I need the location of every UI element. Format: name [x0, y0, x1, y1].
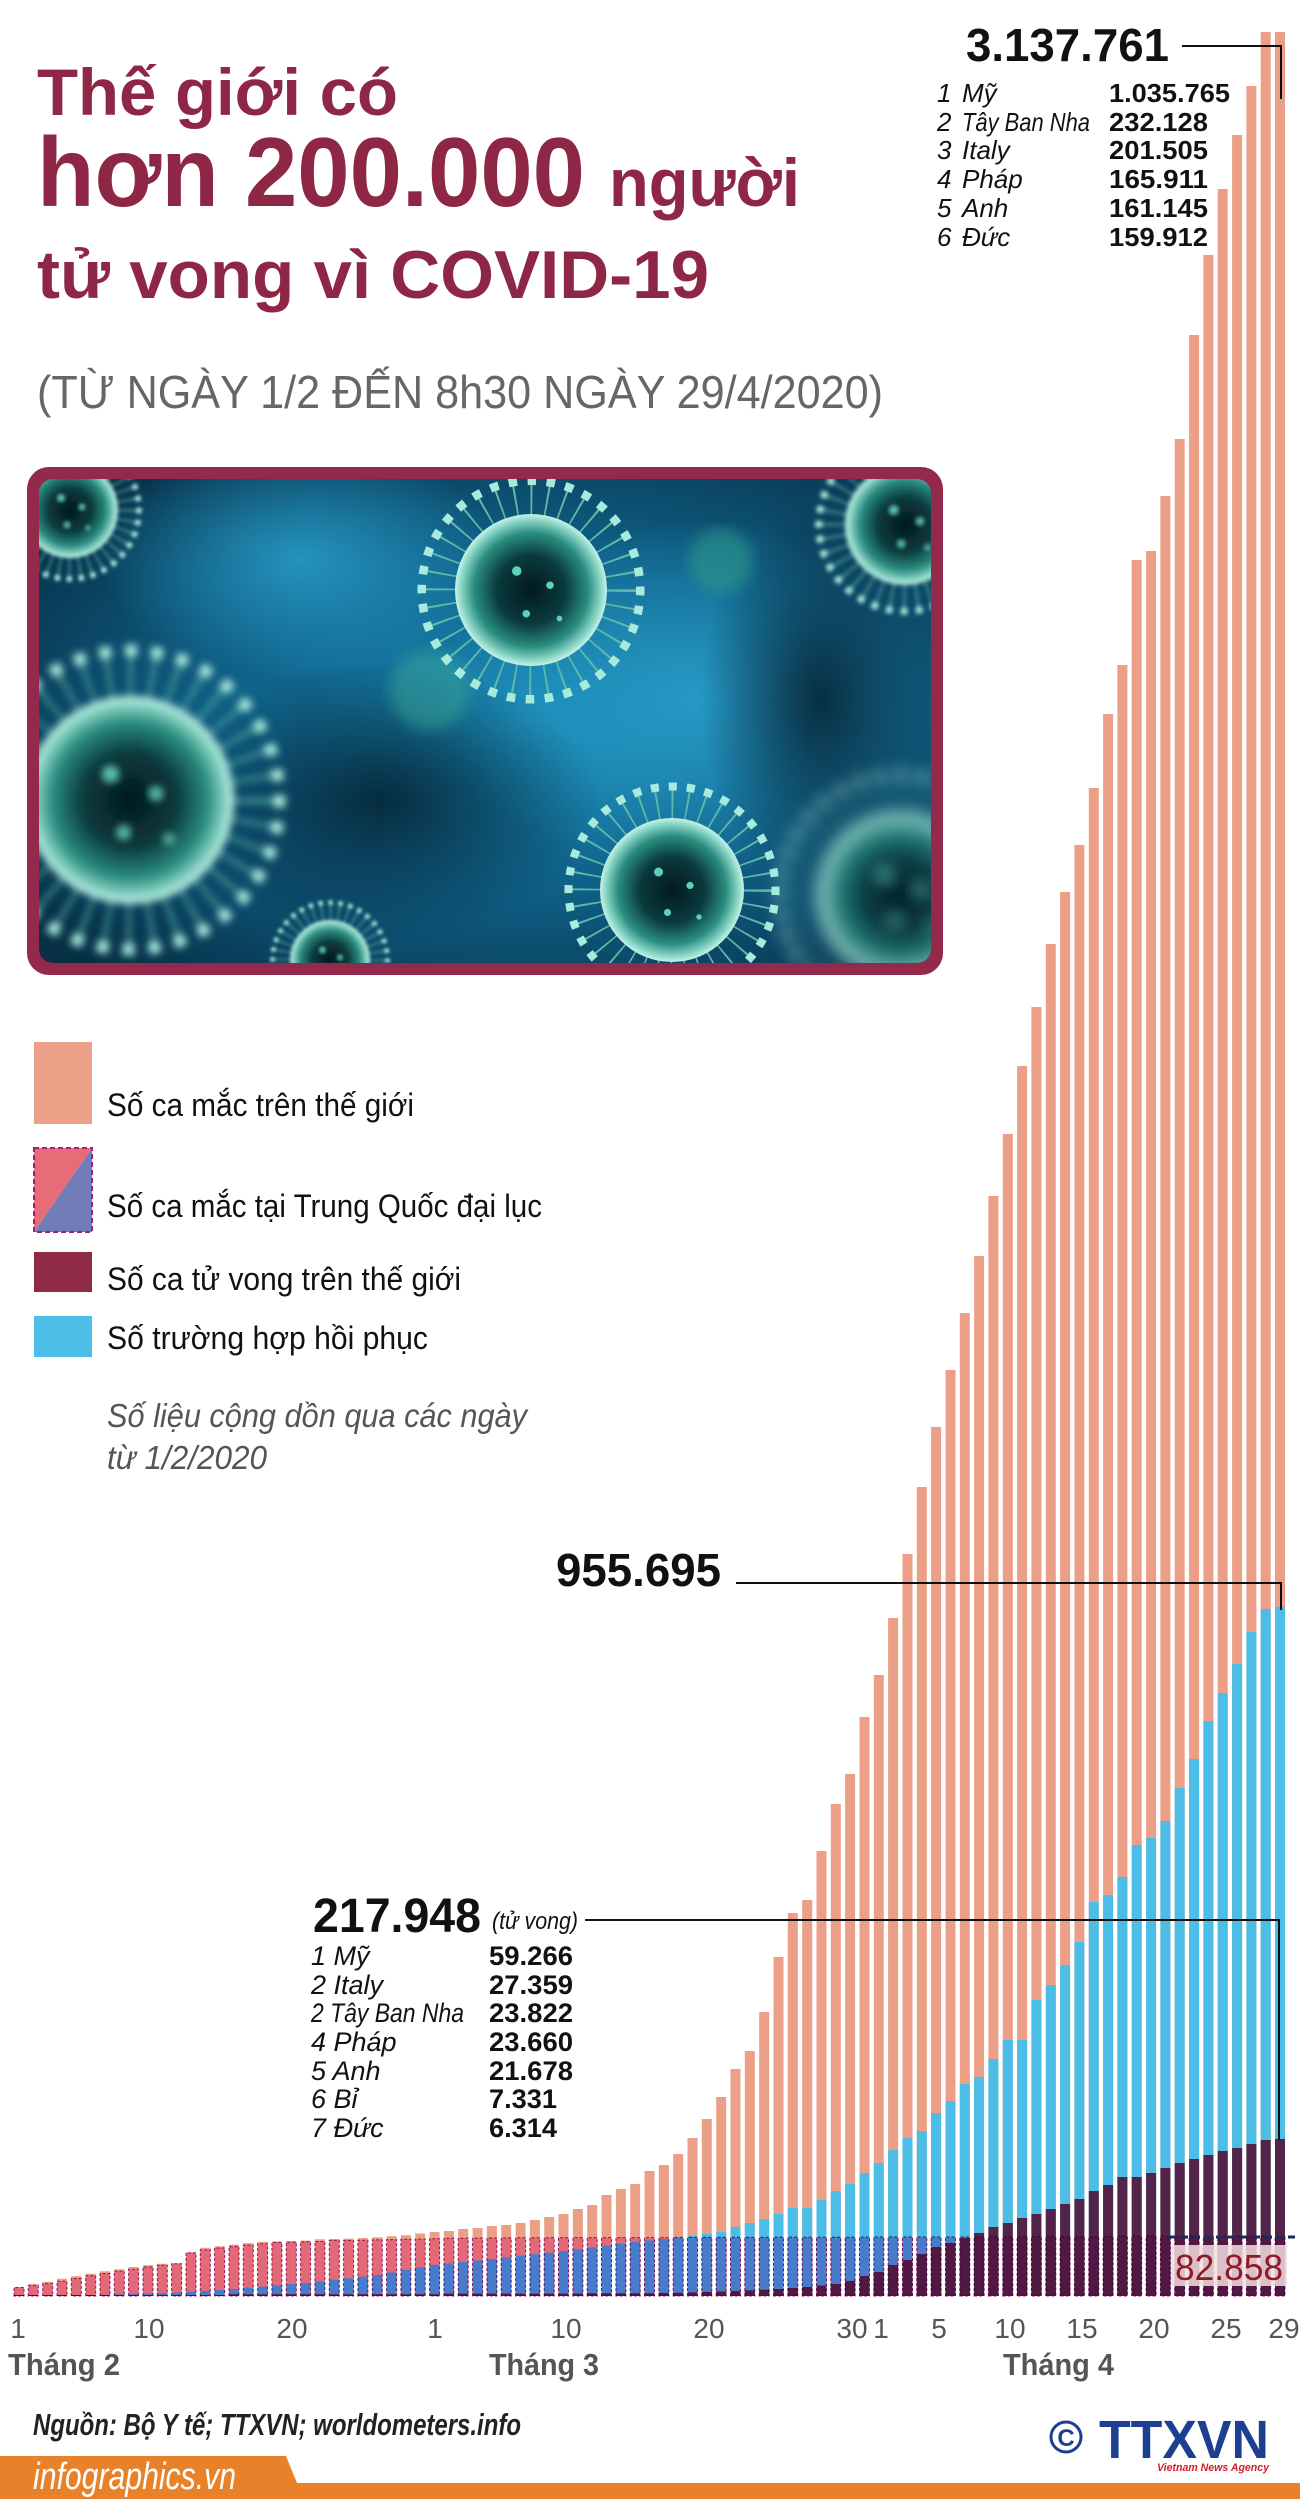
- x axis day labels: 10: [550, 2313, 582, 2344]
- x axis day labels: 20: [1138, 2313, 1170, 2344]
- logo: TTXVN: C: [1057, 2425, 1075, 2452]
- table: cases by country: 161.145: [1109, 193, 1208, 223]
- x axis day labels: 1: [10, 2313, 26, 2344]
- x axis day labels: 1: [427, 2313, 443, 2344]
- table: cases by country: Anh: [960, 193, 1008, 223]
- callout: deaths total: 217.948: [313, 1890, 481, 1943]
- x axis month labels: [8, 2347, 1115, 2382]
- callout: China 82.858: 82.858: [1175, 2247, 1283, 2288]
- table: cases by country: 5: [937, 193, 952, 223]
- x axis day labels: [10, 2313, 1300, 2344]
- table: cases by country: 6: [937, 222, 952, 252]
- table: cases by country: 159.912: [1109, 222, 1208, 252]
- callout: deaths total: (tử vong): [492, 1908, 578, 1935]
- table: cases by country: 201.505: [1109, 135, 1208, 165]
- table: cases by country: Italy: [962, 135, 1012, 165]
- table: deaths by country: 1 Mỹ: [311, 1941, 371, 1971]
- legend: world cases: Số ca mắc trên thế giới: [107, 1087, 414, 1123]
- legend: China cases: [34, 1148, 542, 1232]
- x axis day labels: 25: [1210, 2313, 1242, 2344]
- x axis day labels: 5: [931, 2313, 947, 2344]
- legend: recovered: [34, 1316, 428, 1357]
- callout: world cases total: 3.137.761: [966, 19, 1169, 71]
- callout: China 82.858: [1168, 2237, 1295, 2288]
- x axis day labels: 20: [693, 2313, 725, 2344]
- table: cases by country: Đức: [962, 222, 1010, 252]
- callout: world cases total: [966, 19, 1281, 99]
- table: deaths by country: 6.314: [489, 2113, 557, 2143]
- title: Thế giới có: [37, 55, 398, 129]
- table: cases by country: 3: [937, 135, 952, 165]
- table: deaths by country: 59.266: [489, 1941, 573, 1971]
- title: người: [609, 145, 800, 221]
- table: cases by country: 1.035.765: [1109, 78, 1230, 108]
- callout: recovered total: [556, 1544, 1281, 1610]
- legend: China cases: Số ca mắc tại Trung Quốc đại lục: [107, 1188, 542, 1224]
- x axis month labels: Tháng 3: [489, 2347, 599, 2382]
- x axis month labels: Tháng 2: [8, 2347, 120, 2382]
- logo: TTXVN: TTXVN: [1099, 2410, 1269, 2470]
- table: deaths by country: 27.359: [489, 1970, 573, 2000]
- footer band: infographics.vn: [33, 2456, 236, 2498]
- image panel: virus: [27, 467, 943, 975]
- title: tử vong vì COVID-19: [37, 237, 709, 313]
- table: deaths by country: 21.678: [489, 2056, 573, 2086]
- table: cases by country: Mỹ: [962, 78, 999, 108]
- table: cases by country: Pháp: [962, 164, 1023, 194]
- table: deaths by country: 2 Italy: [310, 1970, 385, 2000]
- subtitle: (TỪ NGÀY 1/2 ĐẾN 8h30 NGÀY 29/4/2020): [37, 366, 883, 418]
- title: [37, 55, 800, 313]
- bars: deaths: [14, 2139, 1285, 2296]
- x axis day labels: 30: [836, 2313, 868, 2344]
- x axis day labels: 15: [1066, 2313, 1098, 2344]
- table: cases by country: 1: [937, 78, 951, 108]
- legend: deaths: Số ca tử vong trên thế giới: [107, 1261, 461, 1297]
- title: hơn 200.000: [37, 117, 585, 227]
- x axis day labels: 10: [133, 2313, 165, 2344]
- table: deaths by country: 4 Pháp: [311, 2027, 397, 2057]
- note: Số liệu cộng dồn qua các ngày: [107, 1397, 529, 1434]
- x axis month labels: Tháng 4: [1003, 2347, 1115, 2382]
- callout: recovered total: 955.695: [556, 1544, 721, 1596]
- table: deaths by country: 2 Tây Ban Nha: [310, 1998, 464, 2028]
- table: deaths by country: [310, 1941, 573, 2143]
- table: cases by country: Tây Ban Nha: [962, 107, 1090, 137]
- table: cases by country: 4: [937, 164, 951, 194]
- footer band: [0, 2456, 1300, 2499]
- table: cases by country: 232.128: [1109, 107, 1208, 137]
- bars: China overlay: [14, 2236, 1285, 2296]
- logo: TTXVN: Vietnam News Agency: [1157, 2462, 1270, 2474]
- legend: recovered: Số trường hợp hồi phục: [107, 1320, 428, 1356]
- legend: deaths: [34, 1252, 461, 1297]
- source: Nguồn: Bộ Y tế; TTXVN; worldometers.info: [33, 2407, 521, 2442]
- x axis day labels: 10: [994, 2313, 1026, 2344]
- table: cases by country: 165.911: [1109, 164, 1208, 194]
- table: deaths by country: 5 Anh: [311, 2056, 381, 2086]
- table: deaths by country: 23.660: [489, 2027, 573, 2057]
- bars: recovered: [14, 1607, 1285, 2296]
- table: deaths by country: 7 Đức: [311, 2113, 384, 2143]
- x axis day labels: 1: [873, 2313, 889, 2344]
- note: từ 1/2/2020: [107, 1439, 268, 1476]
- table: cases by country: 2: [936, 107, 952, 137]
- legend: world cases: [34, 1042, 414, 1124]
- callout: deaths total: [313, 1890, 1279, 2140]
- table: cases by country: [936, 78, 1230, 252]
- table: deaths by country: 23.822: [489, 1998, 573, 2028]
- table: deaths by country: 6 Bỉ: [311, 2084, 360, 2114]
- x axis day labels: 20: [276, 2313, 308, 2344]
- table: deaths by country: 7.331: [489, 2084, 557, 2114]
- note: [107, 1397, 529, 1476]
- x axis day labels: 29: [1268, 2313, 1300, 2344]
- legend: [34, 1042, 542, 1357]
